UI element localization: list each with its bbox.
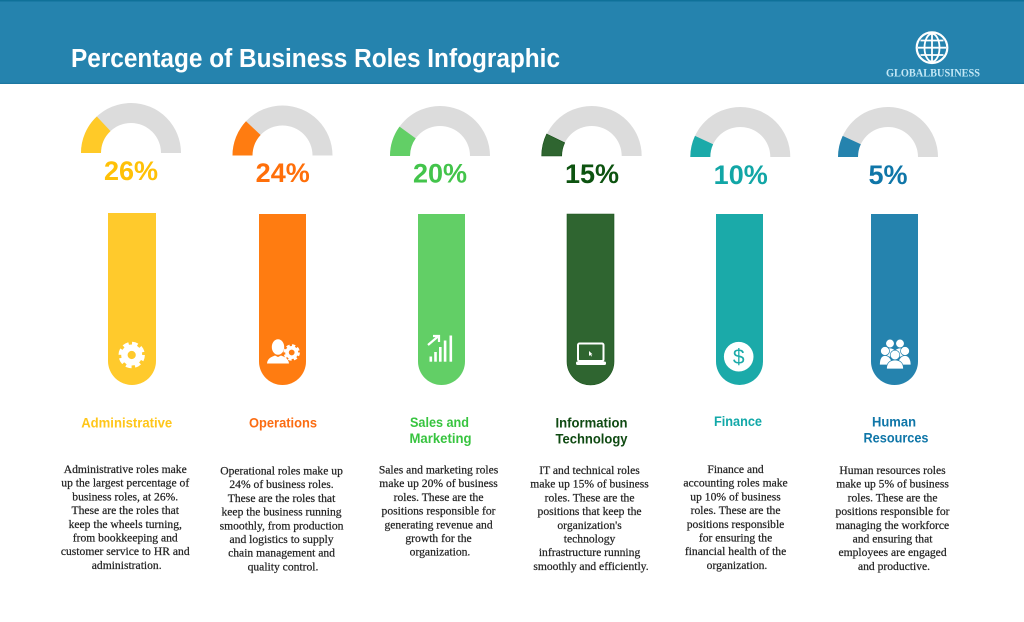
gauge 20% — [390, 106, 490, 156]
percentage 5%: 5% — [868, 160, 908, 190]
description: organization. — [410, 546, 470, 559]
description: make up 15% of business — [530, 478, 649, 491]
description: and logistics to supply — [230, 533, 334, 546]
header banner — [0, 0, 1024, 84]
description: roles. These are the — [545, 491, 635, 504]
gauge 5% — [838, 107, 938, 157]
description: Finance and — [707, 463, 764, 476]
description: for ensuring the — [699, 532, 772, 544]
description: organization. — [707, 559, 767, 572]
column: Sales and Marketing: Marketing — [410, 430, 472, 446]
description: These are the roles that — [71, 504, 180, 517]
heading: Information — [556, 414, 628, 430]
percentage 20%: 20% — [413, 158, 467, 188]
percentage 26%: 26% — [104, 156, 158, 186]
icon: rising bars and arrow — [428, 336, 452, 362]
percentage 15%: 15% — [565, 159, 619, 189]
description: business roles, at 26%. — [72, 490, 178, 503]
icon: dollar coin: $ — [733, 346, 745, 369]
pill bar — [259, 214, 306, 385]
icon: group of people — [880, 339, 911, 369]
description: quality control. — [248, 560, 319, 573]
description: accounting roles make — [683, 477, 788, 490]
description: keep the business running — [221, 506, 342, 519]
description: up the largest percentage of — [61, 477, 189, 490]
heading: Finance — [714, 413, 762, 429]
column: Information Technology: Technology — [556, 430, 628, 446]
description: IT and technical roles — [539, 464, 640, 477]
description: technology — [564, 532, 616, 546]
icon: laptop — [576, 344, 606, 365]
heading: Operations — [249, 414, 317, 430]
percentage 24%: 24% — [256, 158, 310, 188]
description: positions responsible for — [382, 505, 496, 518]
description: smoothly and efficiently. — [533, 560, 649, 573]
column: Operations — [220, 106, 346, 573]
description: organization's — [557, 519, 622, 532]
percentage 10%: 10% — [714, 160, 768, 190]
logo: globe and wordmark — [886, 32, 980, 80]
description: keep the wheels turning, — [69, 518, 182, 531]
description: Human resources roles — [839, 464, 946, 477]
heading: Human — [872, 414, 916, 430]
description: growth for the — [405, 532, 472, 545]
icon: dollar coin — [724, 342, 754, 372]
description: customer service to HR and — [61, 545, 190, 558]
title: Percentage of Business Roles Infographic — [71, 45, 560, 73]
heading: Sales and — [410, 414, 469, 430]
gauge 26% — [81, 103, 181, 153]
description: employees are engaged — [838, 546, 947, 559]
column: Human Resources — [836, 107, 952, 573]
description: positions that keep the — [538, 505, 642, 518]
description: make up 5% of business — [836, 478, 949, 491]
description: managing the workforce — [836, 519, 949, 532]
description: roles. These are the — [394, 491, 484, 504]
gauge 10% — [690, 107, 790, 157]
pill bar — [418, 214, 465, 385]
description: Operational roles make up — [220, 464, 343, 478]
description: These are the roles that — [228, 492, 336, 505]
pill bar — [716, 214, 763, 385]
gauge 24% — [232, 106, 332, 156]
description: Sales and marketing roles — [379, 464, 499, 476]
description: Administrative roles make — [64, 463, 187, 476]
column: Administrative — [61, 103, 193, 572]
logo: globe and wordmark: GLOBALBUSINESS — [886, 66, 980, 80]
column: Information Technology — [530, 106, 652, 573]
column: Human Resources: Resources — [864, 430, 929, 446]
pill bar — [871, 214, 918, 385]
column: Finance — [683, 107, 791, 572]
description: 24% of business roles. — [229, 478, 334, 491]
heading: Administrative — [81, 414, 172, 430]
description: roles. These are the — [691, 504, 781, 517]
description: roles. These are the — [848, 491, 938, 504]
description: from bookkeeping and — [73, 532, 178, 544]
gauge 15% — [542, 106, 642, 156]
icon: person with gear — [267, 339, 299, 364]
description: up 10% of business — [690, 490, 781, 503]
pill bar — [567, 214, 614, 385]
description: financial health of the — [685, 545, 786, 558]
description: chain management and — [228, 547, 335, 560]
description: positions responsible for — [836, 505, 950, 518]
description: and ensuring that — [853, 532, 933, 546]
description: smoothly, from production — [220, 519, 344, 532]
column: Sales and Marketing — [379, 106, 501, 559]
description: infrastructure running — [539, 546, 640, 559]
icon: gear — [121, 344, 143, 366]
description: and productive. — [858, 560, 930, 573]
description: administration. — [92, 559, 162, 572]
description: generating revenue and — [384, 518, 493, 531]
description: make up 20% of business — [379, 477, 498, 490]
pill bar — [108, 213, 156, 385]
description: positions responsible — [687, 518, 784, 531]
